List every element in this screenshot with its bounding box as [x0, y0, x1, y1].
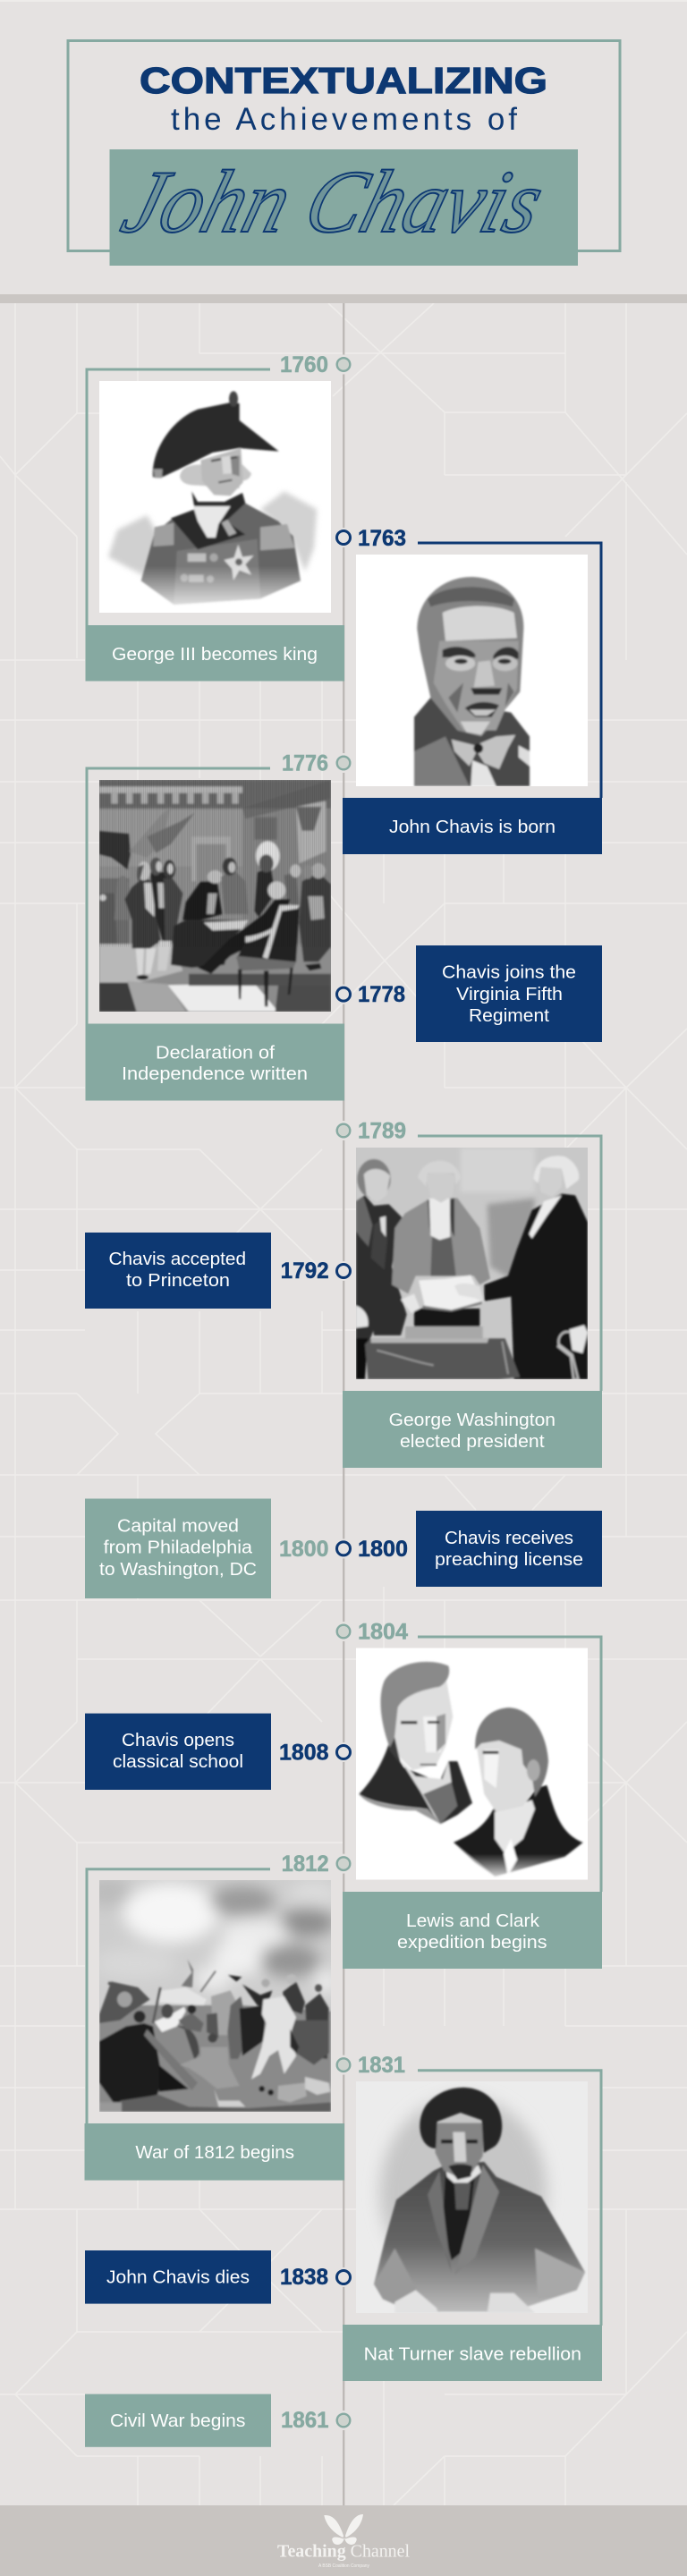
caption bar: Nat Turner slave rebellion	[364, 2343, 581, 2365]
year 1812: 1812	[282, 1852, 329, 1877]
photo: War of 1812 battle	[99, 1880, 331, 2112]
right event box: Chavis receives	[445, 1528, 573, 1548]
caption bar	[86, 1023, 344, 1100]
year 1861: 1861	[281, 2408, 329, 2433]
frame	[87, 1869, 270, 2124]
footer	[0, 2505, 687, 2576]
photo: Lewis and Clark	[356, 1648, 588, 1880]
year 1789	[334, 1118, 406, 1143]
caption bar	[86, 625, 344, 682]
year 1789: 1789	[358, 1118, 406, 1143]
caption bar: Independence written	[122, 1063, 308, 1084]
event: 1831 Nat Turner rebellion	[334, 2053, 602, 2381]
event: 1763 John Chavis born	[334, 526, 602, 854]
left event box: from Philadelphia	[104, 1538, 253, 1558]
event box	[85, 1714, 271, 1790]
caption bar: elected president	[400, 1431, 545, 1452]
year 1763: 1763	[358, 526, 406, 551]
year 1778	[334, 982, 405, 1007]
year 1838: 1838	[280, 2265, 328, 2290]
event box: classical school	[113, 1751, 243, 1772]
logo tagline: A BSB Coalition Company	[318, 2563, 369, 2569]
caption bar: Declaration of	[156, 1043, 275, 1063]
event box: Chavis accepted	[109, 1249, 246, 1269]
event: 1789 George Washington	[334, 1118, 602, 1468]
year 1776: 1776	[282, 751, 328, 776]
year 1808: 1808	[279, 1741, 329, 1766]
year 1760: 1760	[280, 352, 328, 377]
event box: Virginia Fifth	[456, 984, 563, 1004]
header	[68, 41, 620, 266]
event: 1808 classical school	[85, 1714, 353, 1790]
photo: portrait	[356, 2081, 588, 2313]
year 1778: 1778	[358, 982, 405, 1007]
event box	[85, 2250, 271, 2304]
event: 1812 War of 1812	[84, 1852, 353, 2181]
timeline spine	[343, 303, 344, 2505]
frame	[87, 768, 270, 1024]
event box	[85, 1233, 271, 1309]
year 1861	[281, 2408, 353, 2433]
event: 1778 Virginia Fifth Regiment	[334, 945, 602, 1042]
event box: to Princeton	[126, 1270, 230, 1291]
event box: Chavis opens	[122, 1730, 234, 1750]
logo wordmark: Teaching Channel	[277, 2542, 410, 2562]
years 1800: 1800	[358, 1537, 408, 1562]
year 1804: 1804	[358, 1619, 408, 1644]
year 1776	[282, 751, 353, 776]
photo: Declaration of Independence	[99, 780, 331, 1012]
event: 1800 Capital moved and preaching license	[85, 1499, 602, 1598]
event box: Chavis joins the	[442, 962, 576, 983]
year 1812	[282, 1852, 353, 1877]
caption bar: George Washington	[389, 1410, 556, 1430]
left event box	[85, 1499, 271, 1598]
caption bar: War of 1812 begins	[135, 2142, 294, 2163]
event box: Regiment	[469, 1005, 549, 1026]
caption bar	[343, 2325, 602, 2381]
years 1800: 1800	[279, 1537, 329, 1562]
year 1763	[334, 526, 406, 551]
caption bar: Lewis and Clark	[406, 1911, 540, 1931]
event box: Civil War begins	[110, 2411, 245, 2431]
frame	[418, 543, 601, 798]
caption bar	[343, 798, 602, 854]
subtitle: the Achievements of	[171, 102, 517, 137]
event box	[416, 945, 602, 1042]
frame	[418, 2071, 601, 2326]
icon: butterfly logo	[324, 2514, 363, 2545]
title: CONTEXTUALIZING: CONTEXTUALIZING	[140, 60, 547, 101]
year 1792	[281, 1258, 353, 1284]
caption bar: George III becomes king	[112, 644, 318, 665]
header divider band	[0, 294, 687, 303]
signature: John Chavis: John Chavis	[113, 153, 554, 252]
event: 1792 Princeton	[85, 1233, 353, 1309]
caption bar	[343, 1892, 602, 1969]
photo: John Chavis	[356, 555, 588, 786]
frame	[87, 369, 270, 626]
years 1800	[279, 1537, 408, 1562]
event box	[85, 2394, 271, 2447]
caption bar	[343, 1391, 602, 1468]
event: 1760 George III	[86, 352, 353, 682]
frame	[418, 1637, 601, 1892]
year 1808	[279, 1741, 353, 1766]
photo: Washington inauguration	[356, 1148, 588, 1379]
year 1831	[334, 2053, 405, 2078]
photo: George III	[99, 381, 331, 613]
event: 1838 John Chavis dies	[85, 2250, 353, 2304]
year 1804	[334, 1619, 408, 1644]
right event box	[416, 1511, 602, 1587]
caption bar	[84, 2123, 344, 2181]
left event box: Capital moved	[117, 1516, 239, 1537]
event: 1861 Civil War	[85, 2394, 353, 2447]
caption bar: expedition begins	[397, 1932, 547, 1953]
event: 1776 Declaration of Independence	[86, 751, 353, 1100]
event box: John Chavis dies	[106, 2267, 250, 2288]
event: 1804 Lewis and Clark	[334, 1619, 602, 1969]
year 1838	[280, 2265, 353, 2290]
year 1760	[280, 352, 353, 377]
frame	[418, 1136, 601, 1391]
name panel	[109, 149, 578, 266]
right event box: preaching license	[435, 1549, 583, 1570]
left event box: to Washington, DC	[99, 1559, 257, 1580]
year 1831: 1831	[358, 2053, 405, 2078]
header frame	[68, 41, 620, 250]
caption bar: John Chavis is born	[389, 817, 556, 837]
year 1792: 1792	[281, 1258, 329, 1284]
